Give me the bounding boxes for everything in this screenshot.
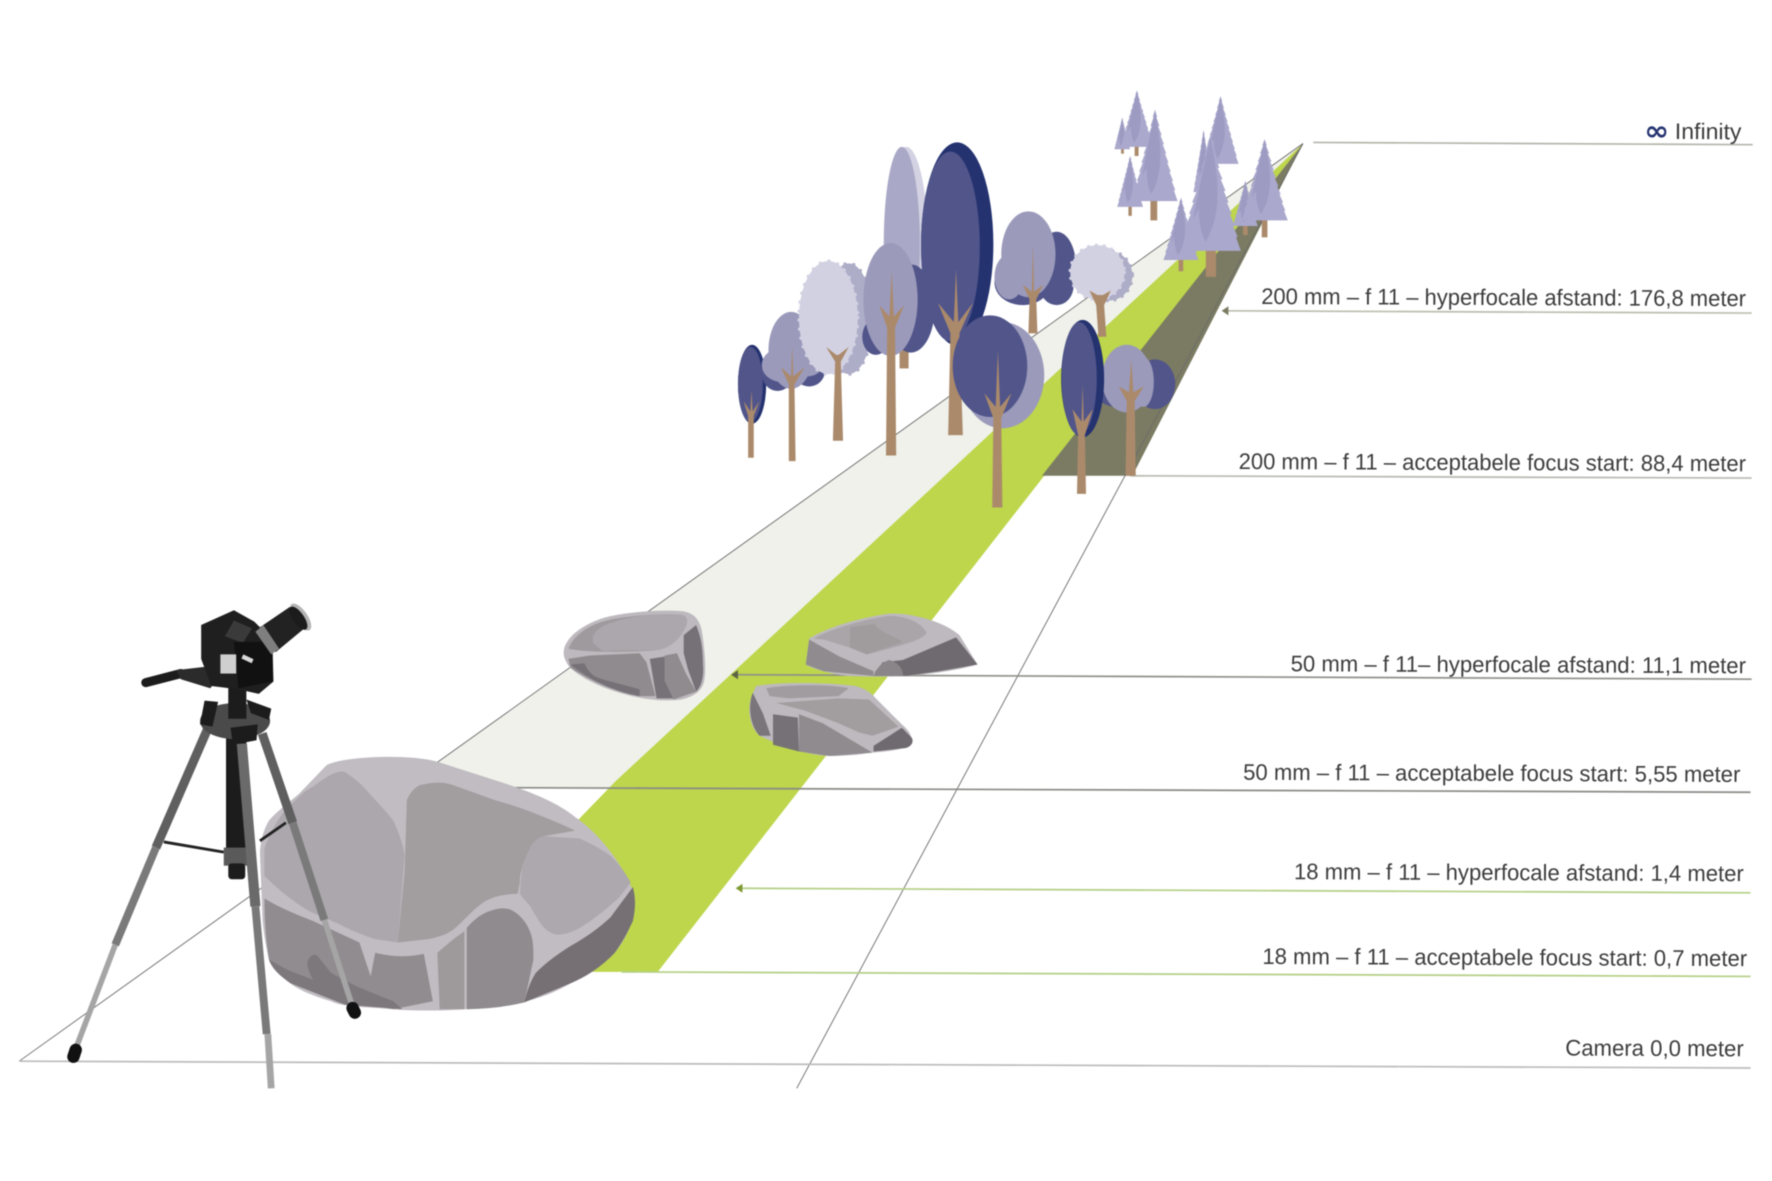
label: 18 mm focus start: 18 mm – f 11 – acceptabele focus start: 0,7 meter [1262, 944, 1748, 971]
pan arm [176, 667, 217, 688]
tree: light fluffy right [1070, 245, 1132, 337]
tripod right leg [262, 733, 355, 1013]
label: 50 mm hyperfocal: 50 mm – f 11– hyperfocale afstand: 11,1 meter [1291, 651, 1747, 678]
tree: lavender with navy back upper right [994, 211, 1076, 333]
rock: left mid-distance [564, 611, 705, 700]
label: 18 mm hyperfocal: 18 mm – f 11 – hyperfocale afstand: 1,4 meter [1294, 859, 1744, 886]
tripod front leg [242, 744, 271, 1088]
tree: navy ellipse right [1061, 320, 1104, 494]
tripod center column [224, 737, 247, 879]
label: 50 mm focus start: 50 mm – f 11 – acceptabele focus start: 5,55 meter [1243, 760, 1741, 787]
pine trunks [1121, 145, 1267, 277]
distance marker lines and arrows [19, 142, 1753, 1068]
trees: deciduous group [738, 142, 1175, 507]
tree: lavender round right [1097, 345, 1175, 476]
rock: right mid-distance [806, 614, 978, 677]
tree: light fluffy left [799, 261, 872, 441]
tree: lavender round left [762, 312, 825, 461]
rock: lower mid-distance [749, 683, 913, 756]
label: infinity: ∞ [1644, 116, 1669, 147]
ground: acceptable focus bands [401, 144, 1303, 972]
tree: lavender with navy back [862, 243, 935, 455]
label: infinity: Infinity [1675, 119, 1742, 144]
label: camera: Camera 0,0 meter [1565, 1036, 1744, 1061]
tree: big navy ellipse [921, 142, 993, 435]
tree: round navy over lavender [953, 315, 1044, 507]
label: infinity [1644, 116, 1742, 147]
tree: tall pale back [884, 147, 928, 368]
camera lens [255, 600, 315, 654]
label: 200 mm hyperfocal: 200 mm – f 11 – hyperfocale afstand: 176,8 meter [1261, 284, 1747, 311]
tripod head plate [200, 687, 271, 745]
tripod braces [164, 823, 286, 852]
tree: small navy ellipse [738, 345, 766, 458]
label: 200 mm focus start: 200 mm – f 11 – acceptabele focus start: 88,4 meter [1239, 449, 1747, 476]
perspective lines [19, 144, 1303, 1088]
trees: pine group [1114, 90, 1288, 277]
tripod left leg [73, 726, 209, 1057]
pan handle [146, 674, 181, 683]
rock: large foreground boulder [260, 757, 635, 1011]
camera on tripod [73, 600, 355, 1088]
camera body [201, 610, 273, 694]
